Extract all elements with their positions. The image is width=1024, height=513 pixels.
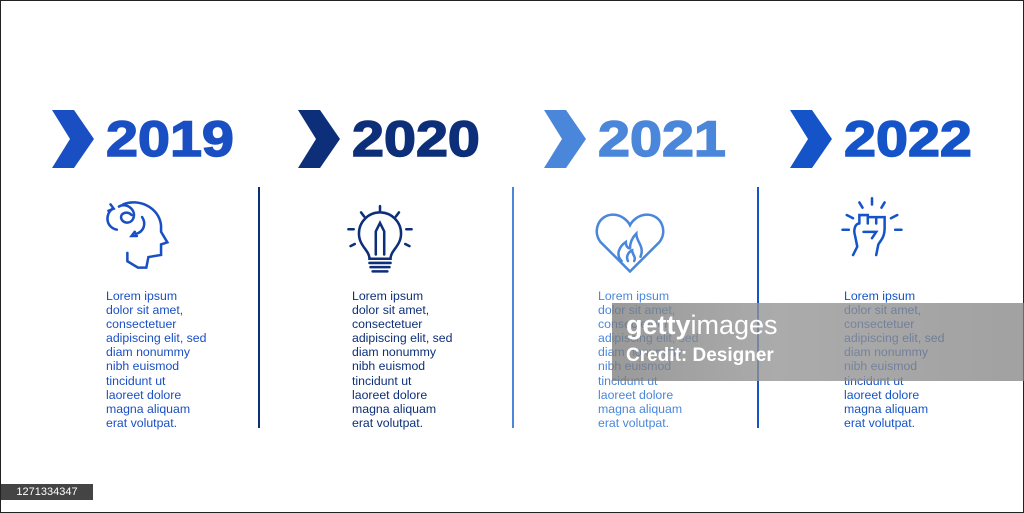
text 2021	[598, 289, 698, 430]
text 2022: diam nonummy	[844, 345, 928, 359]
text 2022: tincidunt ut	[844, 374, 903, 388]
text 2022: adipiscing elit, sed	[844, 331, 944, 345]
divider	[258, 187, 260, 428]
text 2022	[844, 289, 944, 430]
step 2021	[544, 110, 726, 430]
watermark band: Credit: Designer	[626, 345, 774, 366]
text 2020: nibh euismod	[352, 359, 425, 373]
text 2020: adipiscing elit, sed	[352, 331, 452, 345]
text 2021: magna aliquam	[598, 402, 682, 416]
step 2020	[298, 110, 480, 430]
text 2021: consectetuer	[598, 317, 668, 331]
icon: heart with flame	[596, 213, 664, 274]
text 2021: erat volutpat.	[598, 416, 669, 430]
text 2019: erat volutpat.	[106, 416, 177, 430]
year 2019: 2019	[106, 111, 234, 167]
chevron 2022	[790, 110, 832, 168]
text 2021: diam nonummy	[598, 345, 682, 359]
step 2019	[52, 110, 234, 430]
text 2022: dolor sit amet,	[844, 303, 921, 317]
step 2022	[790, 110, 972, 430]
text 2021: laoreet dolore	[598, 388, 673, 402]
image id: 1271334347	[16, 486, 78, 498]
text 2022: Lorem ipsum	[844, 289, 915, 303]
text 2019	[106, 289, 206, 430]
chevron 2019	[52, 110, 94, 168]
text 2019: tincidunt ut	[106, 374, 165, 388]
icon: head with arrows	[106, 201, 170, 269]
text 2020: magna aliquam	[352, 402, 436, 416]
text 2019: Lorem ipsum	[106, 289, 177, 303]
year 2022: 2022	[844, 111, 972, 167]
text 2020: dolor sit amet,	[352, 303, 429, 317]
watermark band	[612, 303, 1024, 381]
chevron 2020	[298, 110, 340, 168]
text 2020	[352, 289, 452, 430]
text 2019: consectetuer	[106, 317, 176, 331]
text 2022: nibh euismod	[844, 359, 917, 373]
text 2020: erat volutpat.	[352, 416, 423, 430]
text 2019: adipiscing elit, sed	[106, 331, 206, 345]
text 2020: diam nonummy	[352, 345, 436, 359]
text 2019: magna aliquam	[106, 402, 190, 416]
text 2022: laoreet dolore	[844, 388, 919, 402]
text 2019: laoreet dolore	[106, 388, 181, 402]
text 2021: nibh euismod	[598, 359, 671, 373]
text 2021: Lorem ipsum	[598, 289, 669, 303]
text 2022: consectetuer	[844, 317, 914, 331]
text 2022: magna aliquam	[844, 402, 928, 416]
watermark text: gettyimages	[626, 310, 778, 340]
icon: raised fist	[841, 197, 903, 256]
text 2022: erat volutpat.	[844, 416, 915, 430]
text 2020: tincidunt ut	[352, 374, 411, 388]
text 2020: consectetuer	[352, 317, 422, 331]
year 2020: 2020	[352, 111, 480, 167]
text 2020: Lorem ipsum	[352, 289, 423, 303]
text 2020: laoreet dolore	[352, 388, 427, 402]
text 2021: adipiscing elit, sed	[598, 331, 698, 345]
image id	[1, 484, 93, 500]
text 2021: tincidunt ut	[598, 374, 657, 388]
divider	[512, 187, 514, 428]
text 2019: dolor sit amet,	[106, 303, 183, 317]
divider	[757, 187, 759, 428]
icon: lightbulb with pencil	[347, 204, 413, 273]
chevron 2021	[544, 110, 586, 168]
text 2019: diam nonummy	[106, 345, 190, 359]
text 2021: dolor sit amet,	[598, 303, 675, 317]
year 2021: 2021	[598, 111, 726, 167]
text 2019: nibh euismod	[106, 359, 179, 373]
